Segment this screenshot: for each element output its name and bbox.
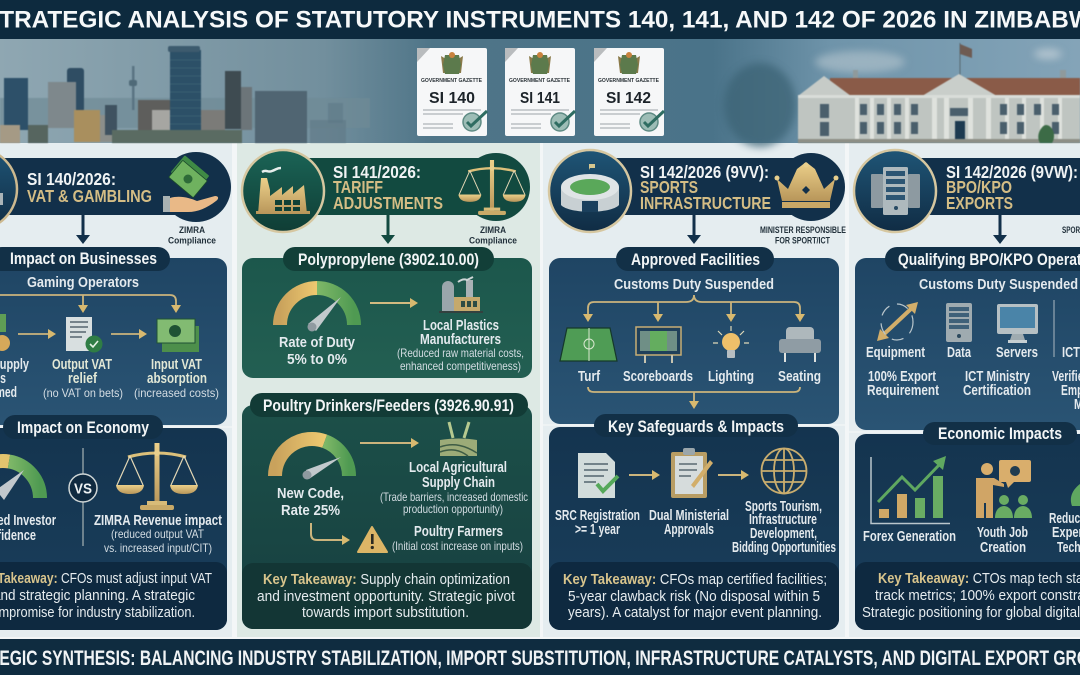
key takeaway [242,563,532,629]
minister label: MINISTER RESPONSIBLE [760,225,846,235]
icon: reduced tech [1071,484,1080,506]
header band: BPO/KPO [946,177,1012,197]
text: local plastics manufacturers: Local Plastics [423,318,499,334]
header band [895,158,1080,244]
text: SRC registration [555,508,640,538]
divider [1053,300,1055,357]
text: youth job creation: Creation [980,540,1026,556]
text: poultry farmers [392,524,523,553]
text: rate of duty: 5% to 0% [287,352,347,368]
text: local plastics manufacturers: Manufacturers [420,332,501,348]
requirement: certification: ICT Ministry [965,369,1030,385]
item labels [866,345,1080,361]
text: dual ministerial approvals: Dual Ministerial [649,508,729,524]
arrow [360,438,419,448]
branch arrows [583,295,805,322]
icon: globe [762,448,806,494]
section: impact on economy: Impact on Economy [17,418,149,437]
key takeaway [0,562,227,630]
text: output VAT: relief [68,371,97,387]
requirement: export: Requirement [867,383,939,399]
compliance label: ZIMRA [179,225,205,236]
item labels: Servers [996,345,1038,361]
text: input VAT: (increased costs) [134,386,219,400]
icon: crown [774,162,838,208]
text: forex generation: Forex Generation [863,529,956,545]
icon: scales [458,160,526,215]
section: polypropylene [242,247,532,378]
gazette: SI 141: GOVERNMENT GAZETTE [509,78,571,84]
text: poultry farmers: Poultry Farmers [414,524,503,540]
requirement: export: 100% Export [868,369,936,385]
icon: money in hand [163,155,218,212]
header band: TARIFF [333,177,383,197]
text: rate of duty: Rate of Duty [279,335,355,351]
text: sports tourism: Bidding Opportunities [732,540,836,556]
text: ZIMRA revenue: vs. increased input/CIT) [104,541,212,555]
section: qualifying operators [855,247,1080,430]
text: local plastics manufacturers: (Reduced raw material costs, [397,346,524,360]
text: output VAT [43,357,123,400]
text: SRC registration: SRC Registration [555,508,640,524]
text: input VAT: absorption [147,371,207,387]
section: approved facilities: Customs Duty Suspended [614,277,774,293]
icon: scales [116,443,198,510]
compliance label: ZIMRA [480,225,506,236]
panel: SI 142 BPO KPO exports [849,150,1080,630]
panel: SI 141 tariff adjustments [242,150,532,629]
header band: ADJUSTMENTS [333,193,443,213]
icon: document check [66,317,102,352]
gazette: SI 142: GOVERNMENT GAZETTE [598,78,660,84]
section: economic impacts [849,422,1080,630]
header band [0,148,231,244]
chart: forex growth [871,456,950,524]
gazette: SI 141 [505,48,575,136]
compliance label: Compliance [168,236,216,246]
facility labels: Turf [578,369,600,385]
section: approved facilities: Approved Facilities [631,250,760,269]
text: ZIMRA revenue: (reduced output VAT [111,527,205,541]
key takeaway: Key Takeaway: CFOs map certified facilities; [563,571,827,588]
text: local plastics manufacturers: enhanced competitiveness) [400,359,521,373]
header band: INFRASTRUCTURE [640,193,771,213]
icon: clipboard [671,448,713,498]
header band: SPORTS [640,177,698,197]
icon: youth mentor [976,460,1032,518]
compliance label: Compliance [469,236,517,246]
section: impact on businesses: Gaming Operators [27,275,139,291]
facility labels: Lighting [708,369,754,385]
key takeaway [855,562,1080,630]
text: ZIMRA revenue: ZIMRA Revenue impact [94,513,222,529]
icon: equipment arrows [877,302,918,341]
text: new code [277,486,344,519]
text: sports tourism: Infrastructure [749,512,817,528]
requirement: verified metrics [1052,369,1080,413]
icon: warning [358,527,387,552]
arrow [718,470,749,480]
icon: factory [242,150,324,232]
header band: SI 140/2026: [27,169,116,189]
item labels: Equipment [866,345,925,361]
text: dual ministerial approvals: Approvals [664,522,714,538]
compliance label [168,225,216,246]
section: poultry drinkers and feeders: Poultry Drinkers/Feeders (3926.90.91) [263,396,514,415]
item labels: Data [947,345,972,361]
branch arrows [0,295,181,339]
key takeaway: 5-year clawback risk (No disposal within 5 [568,588,820,605]
minister label: FOR SPORT/ICT [775,236,830,246]
section: approved facilities [549,247,839,424]
gazette: SI 140: GOVERNMENT GAZETTE [421,78,483,84]
text: sports tourism: Sports Tourism, [745,499,822,515]
text: local agricultural supply chain: (Trade barriers, increased domestic [380,490,528,504]
facility labels [578,369,821,385]
bracket arrow [588,387,800,409]
text: ZIMRA revenue [94,513,222,555]
text: dual ministerial approvals [649,508,729,538]
header band: SI 142/2026 (9VV): [640,162,769,182]
key takeaway: Key Takeaway: Supply chain optimization [263,571,510,588]
VS divider: VS [74,482,92,498]
text: SRC registration: >= 1 year [575,522,620,538]
title bar [0,0,1080,39]
key takeaway [549,562,839,630]
section: impact on economy [0,415,232,630]
text: youth job creation [977,525,1028,556]
synthesis bar [0,639,1080,675]
minister label [760,225,846,246]
section: impact on businesses: Impact on Businesses [10,249,157,268]
icon: monitor [997,304,1038,343]
icon: scoreboard [636,327,681,363]
header band [283,153,530,244]
section: polypropylene: Polypropylene (3902.10.00) [298,250,479,269]
arrow [629,470,660,480]
section: impact on businesses [0,247,227,425]
key takeaway: years). A catalyst for major event planning. [568,604,822,621]
header band [590,153,845,244]
icon: light bulb [713,326,749,358]
header band: VAT & GAMBLING [27,186,152,206]
text: output VAT: Output VAT [52,357,112,373]
text: local agricultural supply chain: Local Agricultural [409,460,507,476]
icon: servers [854,150,936,232]
text: sports tourism [732,499,836,556]
section: key safeguards and impacts [543,414,845,630]
gauge: investor confidence [0,461,40,500]
L arrow [311,523,350,545]
text: new code: New Code, [277,486,344,502]
panel: SI 140 VAT and gambling [0,148,232,630]
section: poultry drinkers and feeders [242,393,532,629]
skyline [0,46,370,143]
requirement: certification [963,369,1031,399]
key takeaway: towards import substitution. [302,604,469,621]
key takeaway: and investment opportunity. Strategic pivot [257,588,516,605]
text: input VAT: Input VAT [151,357,202,373]
panel: SI 142 sports infrastructure [543,150,846,630]
text: new code: Rate 25% [281,503,340,519]
text: local plastics manufacturers [397,318,524,373]
icon: data tower [946,303,972,342]
text: input VAT [134,357,219,400]
banner: skyline and parliament [0,39,1080,147]
header band: EXPORTS [946,193,1013,213]
text: local agricultural supply chain: production opportunity) [403,502,503,516]
text: rate of duty [279,335,355,368]
gauge: new code [275,439,349,480]
gazette: SI 140 [417,48,487,136]
section: key safeguards and impacts: Key Safeguards & Impacts [608,417,784,436]
compliance label [469,225,517,246]
facility labels: Scoreboards [623,369,693,385]
text: local agricultural supply chain [380,460,528,516]
icon: SRC document [578,453,618,498]
text: poultry farmers: (Initial cost increase on inputs) [392,539,523,553]
parliament building [724,43,1080,147]
gazette: SI 141: SI 141 [520,90,560,107]
text: reduced expertise [1049,511,1080,556]
icon: cash stack [157,319,199,352]
icon: plastics plant [439,277,483,313]
text: left item [0,357,29,401]
text: output VAT: (no VAT on bets) [43,386,123,400]
requirement: certification: Certification [963,383,1031,399]
column backgrounds [0,143,1080,639]
facility labels: Seating [778,369,821,385]
icon: wheat field [440,422,477,456]
icon: supply [0,314,10,351]
text: youth job creation: Youth Job [977,525,1028,541]
icon: turf [560,328,617,361]
icon: stadium [549,150,631,232]
header band: SI 141/2026: [333,162,421,182]
text: sports tourism: Development, [750,526,817,542]
arrow [370,298,418,308]
gauge: rate of duty [280,288,354,332]
gazette: SI 142 [594,48,664,136]
requirement: export [867,369,939,399]
VS divider [69,448,97,546]
text: investor confidence [0,513,56,544]
gazette: SI 140: SI 140 [429,90,475,107]
icon: seating [779,327,821,362]
text: local agricultural supply chain: Supply Chain [422,475,495,491]
gazette: SI 142: SI 142 [606,90,651,107]
